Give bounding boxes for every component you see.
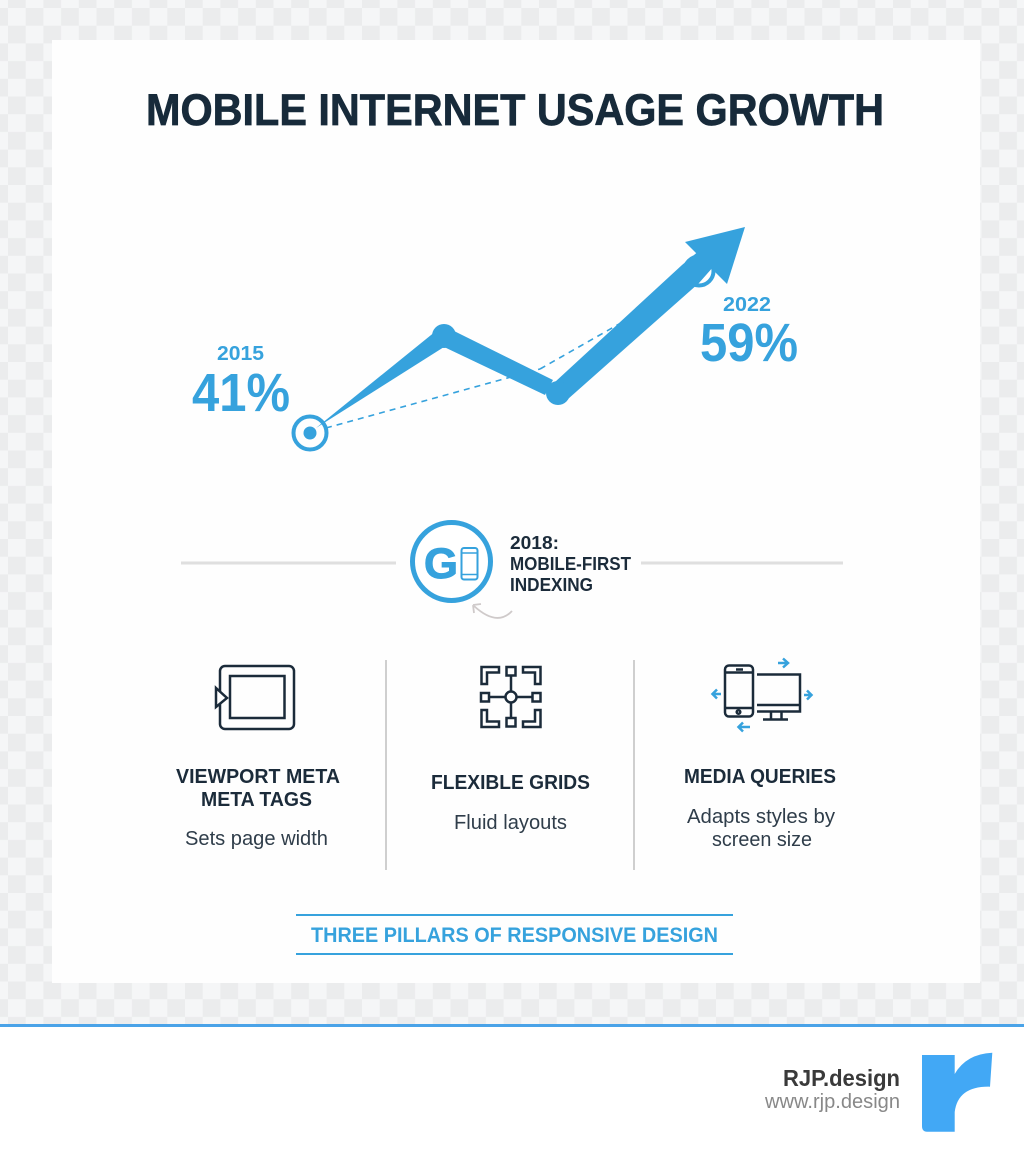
title: MOBILE INTERNET USAGE GROWTH: [146, 86, 884, 135]
icon: grid nodes: [481, 667, 540, 727]
dashed trend line: [326, 311, 642, 428]
brand text: www.rjp.design: [764, 1091, 900, 1113]
icon: brand logo r: [922, 1053, 992, 1132]
heading: META TAGS: [201, 789, 312, 811]
milestone text: MOBILE-FIRST: [510, 554, 631, 574]
icon: curved arrow: [473, 604, 512, 618]
mid data points: [432, 324, 570, 405]
label: 2015 value: [192, 343, 290, 423]
main white panel: [52, 40, 980, 983]
milestone text: INDEXING: [510, 575, 593, 595]
description: Adapts styles by: [687, 806, 835, 828]
column divider 1: [385, 660, 387, 870]
end ring marker: [684, 256, 714, 286]
brand text: RJP.design: [783, 1065, 900, 1091]
description: Fluid layouts: [454, 812, 567, 834]
pillar: viewport meta tags: [176, 666, 340, 850]
heading: [176, 766, 340, 811]
milestone text: [510, 533, 631, 595]
pillar: flexible grids: [431, 667, 590, 834]
column divider 2: [633, 660, 635, 870]
line chart: mobile usage growth: [294, 227, 745, 450]
heading: FLEXIBLE GRIDS: [431, 772, 590, 794]
description: Sets page width: [185, 828, 328, 850]
milestone text: 2018:: [510, 533, 559, 553]
label: 2015 value: 41%: [192, 363, 290, 423]
description: screen size: [712, 829, 812, 851]
caption: three pillars: THREE PILLARS OF RESPONSIVE DESIGN: [311, 923, 718, 947]
footer accent line: [0, 1024, 1024, 1027]
heading: MEDIA QUERIES: [684, 766, 836, 788]
label: 2022 value: 2022: [723, 294, 771, 316]
milestone divider right: [641, 562, 843, 564]
icon: Google mobile-first badge: G: [424, 540, 458, 588]
footer bar: [0, 1024, 1024, 1154]
heading: VIEWPORT META: [176, 766, 340, 788]
growth line segments: [316, 331, 444, 428]
icon: Google mobile-first badge: [412, 522, 490, 600]
description: [687, 806, 835, 851]
arrow head: [685, 227, 745, 284]
label: 2015 value: 2015: [217, 343, 264, 365]
icon: responsive devices: [712, 658, 812, 732]
milestone divider left: [181, 562, 396, 564]
brand text: [764, 1065, 900, 1113]
icon: tablet viewport: [216, 666, 294, 729]
pillar: media queries: [684, 658, 836, 851]
label: 2022 value: 59%: [700, 313, 798, 373]
start ring marker: [294, 416, 326, 450]
